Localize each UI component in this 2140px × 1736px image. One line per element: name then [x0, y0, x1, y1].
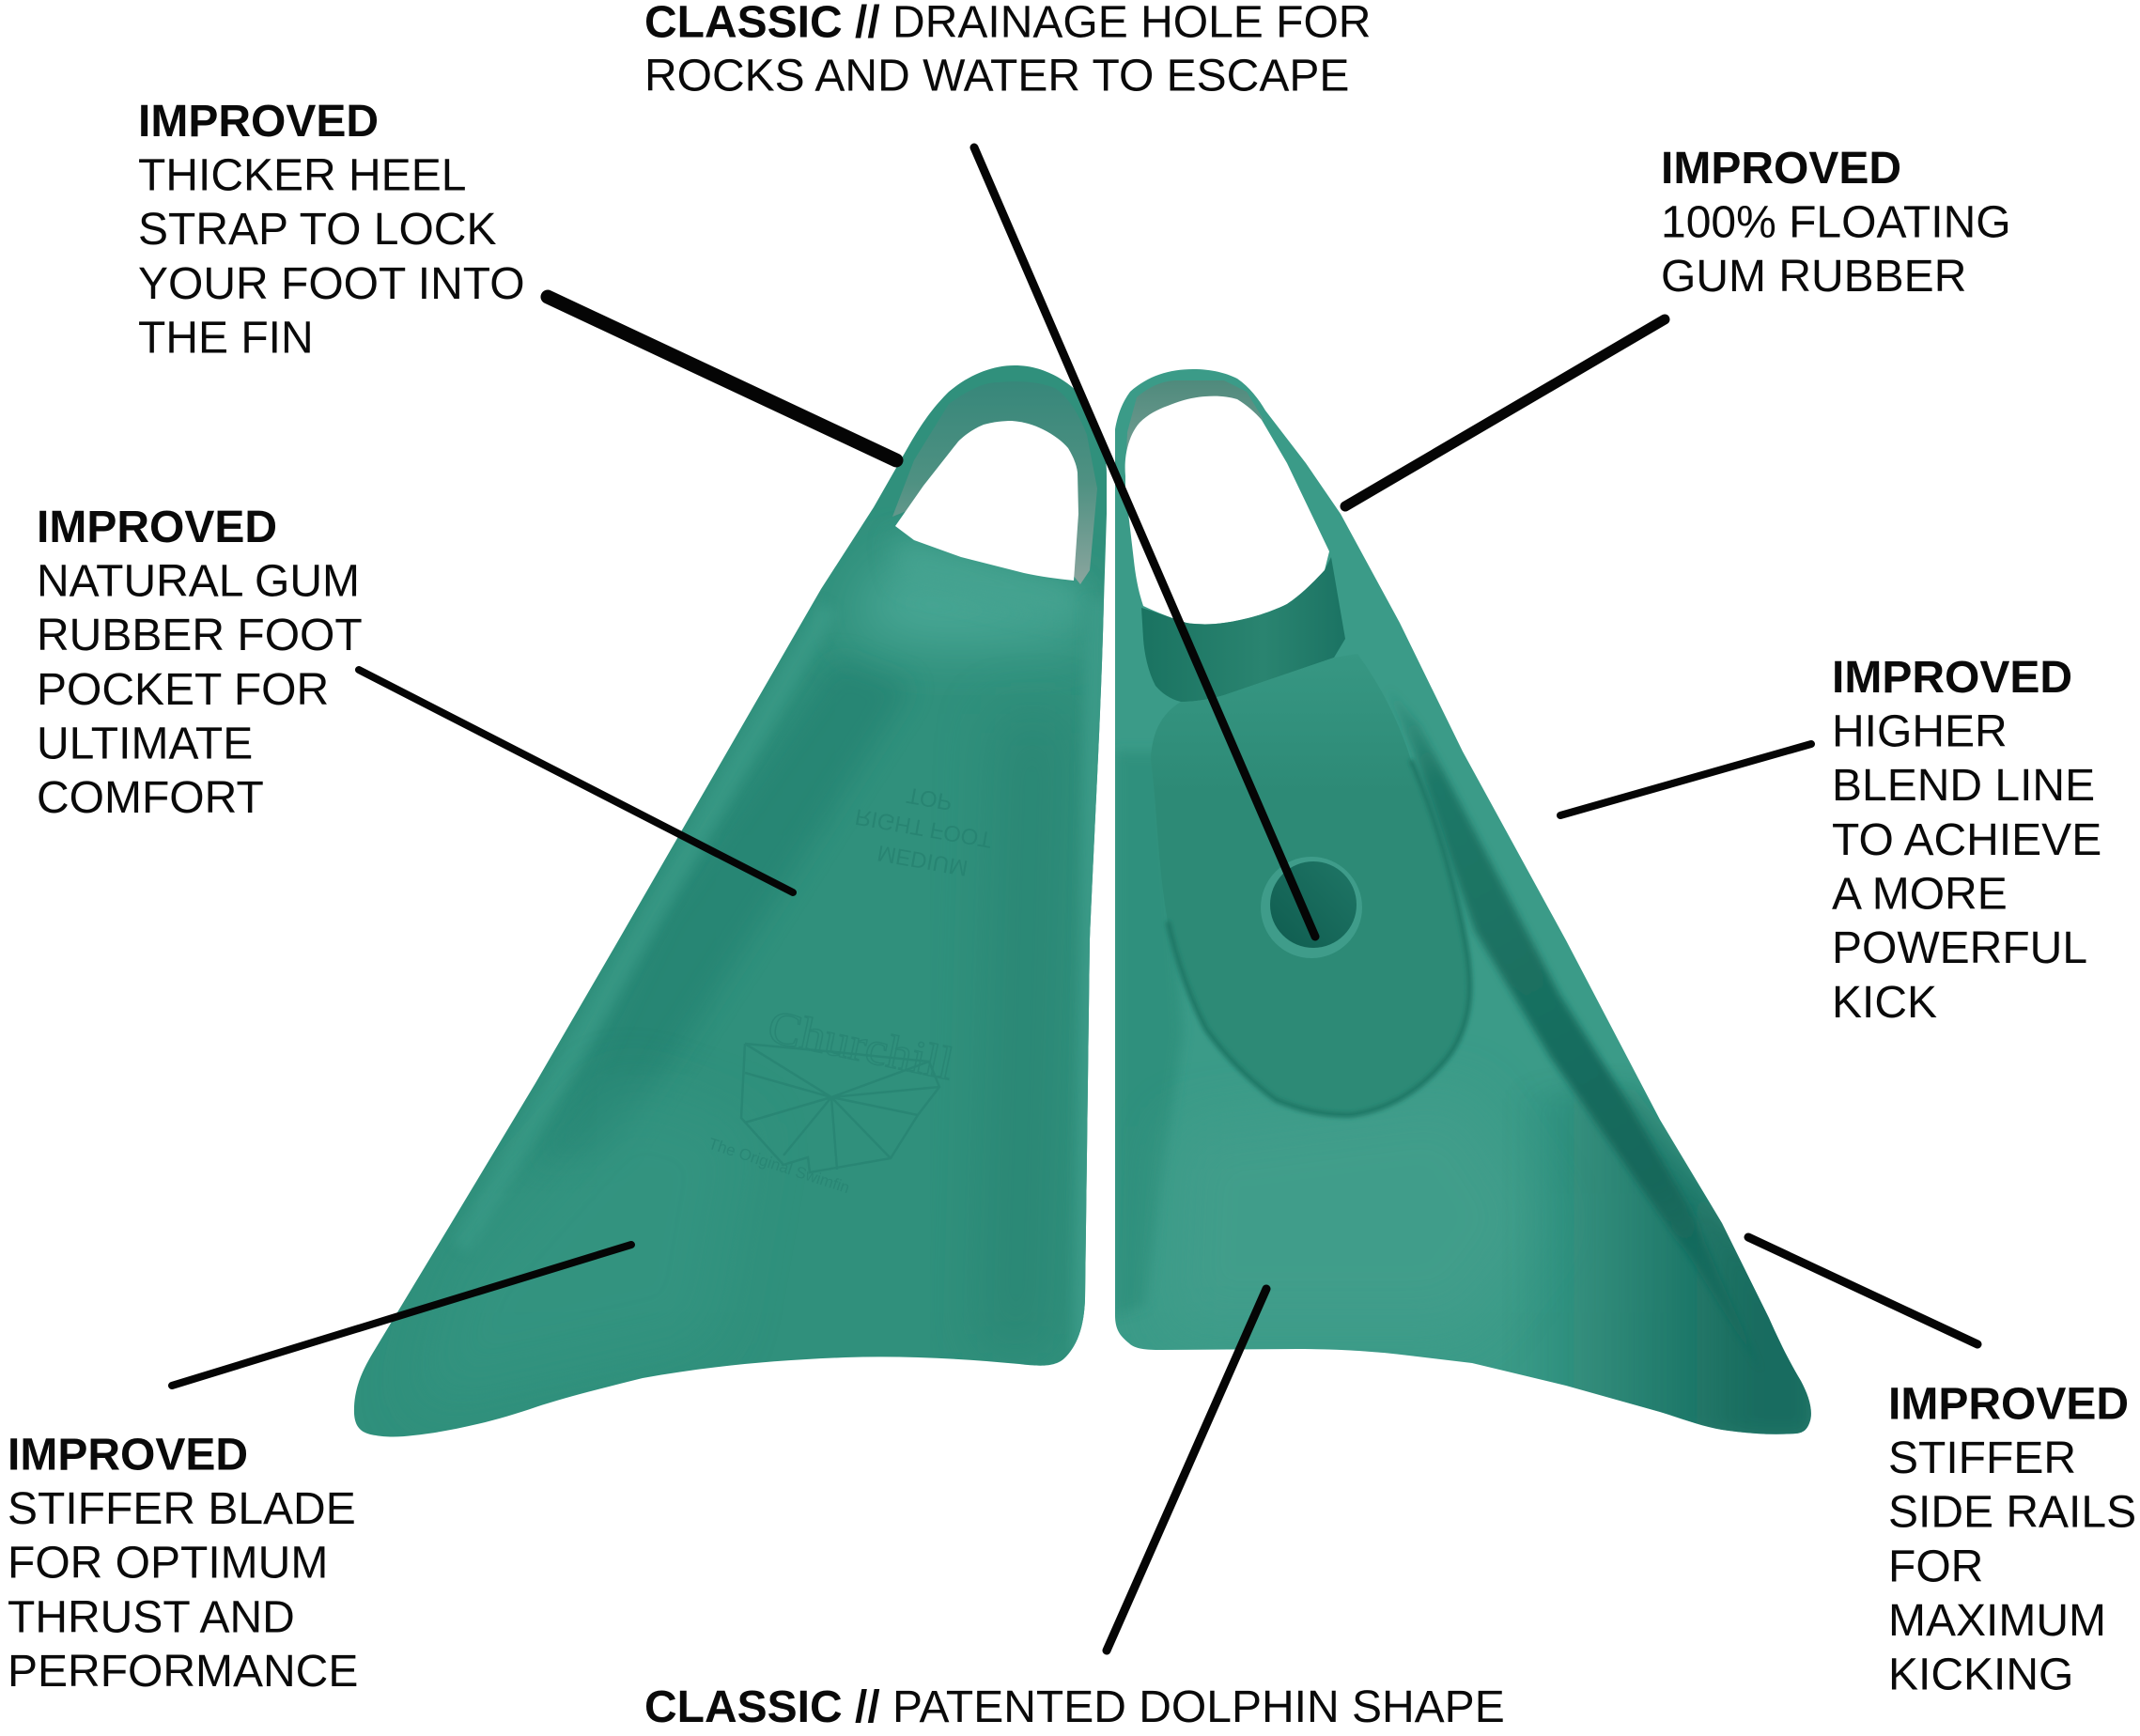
callout: dolphin shape: CLASSIC // PATENTED DOLPHIN SHAPE — [644, 1682, 1505, 1732]
pointer: dolphin shape — [1107, 1289, 1266, 1651]
callout: floating rubber: IMPROVED — [1661, 144, 1901, 194]
callout: floating rubber: GUM RUBBER — [1661, 252, 1966, 302]
callout: side rails: KICKING — [1888, 1650, 2073, 1700]
callout: blend line: A MORE — [1832, 870, 2008, 919]
pointer: blend line — [1560, 744, 1811, 815]
callout: side rails: IMPROVED — [1888, 1379, 2129, 1430]
dark side rail — [1398, 711, 1730, 1313]
callout: heel strap: IMPROVED — [138, 97, 379, 147]
right fin foot opening — [1125, 396, 1329, 624]
embossed size text — [847, 774, 1000, 884]
embossed logo — [706, 1000, 958, 1197]
right fin foot pocket interior — [1141, 557, 1345, 702]
callout: blend line: POWERFUL — [1832, 923, 2087, 973]
embossed size text: MEDIUM — [876, 840, 969, 880]
callout: floating rubber: 100% FLOATING — [1661, 197, 2011, 248]
left fin heel strap inner face — [892, 381, 1097, 584]
callout: stiffer blade: THRUST AND — [8, 1593, 295, 1642]
callout: drainage hole: ROCKS AND WATER TO ESCAPE — [644, 51, 1349, 101]
callout: side rails: SIDE RAILS — [1888, 1488, 2136, 1537]
callout: foot pocket: COMFORT — [37, 773, 264, 823]
callout: stiffer blade: STIFFER BLADE — [8, 1484, 356, 1534]
callout: foot pocket: POCKET FOR — [37, 665, 329, 715]
embossed size text: RIGHT FOOT — [853, 803, 995, 852]
left fin — [354, 365, 1109, 1437]
callout: side rails: STIFFER — [1888, 1434, 2076, 1483]
callout: foot pocket: NATURAL GUM — [37, 556, 360, 607]
embossed logo: The Original Swimfin — [706, 1135, 852, 1197]
callout: blend line: KICK — [1832, 978, 1937, 1028]
callout: stiffer blade: IMPROVED — [8, 1430, 248, 1480]
callout: heel strap: THICKER HEEL — [138, 150, 466, 201]
callout: heel strap: STRAP TO LOCK — [138, 205, 496, 255]
right fin heel strap inner face — [1125, 380, 1264, 479]
pointer: side rails — [1748, 1237, 1977, 1344]
callout: heel strap: YOUR FOOT INTO — [138, 259, 525, 309]
callout: side rails: FOR — [1888, 1542, 1983, 1591]
right fin raised foot pocket — [1151, 654, 1470, 1115]
callout: blend line: TO ACHIEVE — [1832, 815, 2101, 865]
pointer: foot pocket — [359, 670, 793, 892]
pointer: heel strap — [548, 297, 896, 460]
callout: blend line: BLEND LINE — [1832, 761, 2095, 811]
callout: foot pocket: RUBBER FOOT — [37, 611, 363, 660]
embossed logo: Churchill — [764, 1000, 958, 1090]
pointer lines — [172, 147, 1977, 1651]
callout: side rails: MAXIMUM — [1888, 1596, 2106, 1646]
callout: heel strap: THE FIN — [138, 314, 314, 363]
callout: stiffer blade: PERFORMANCE — [8, 1647, 358, 1697]
callout: foot pocket: IMPROVED — [37, 503, 277, 552]
drainage hole — [1261, 857, 1362, 958]
right fin — [1115, 369, 1822, 1447]
callout: blend line: IMPROVED — [1832, 653, 2072, 703]
tail shading — [1538, 1085, 1811, 1434]
right fin body — [1115, 369, 1811, 1434]
pocket shadow edge — [1168, 760, 1470, 1115]
callout: stiffer blade: FOR OPTIMUM — [8, 1539, 328, 1588]
pointer: drainage hole — [974, 147, 1315, 937]
callout: blend line: HIGHER — [1832, 706, 2008, 757]
pointer: stiffer blade — [172, 1245, 631, 1386]
pointer: floating rubber — [1345, 319, 1665, 506]
left fin foot opening — [895, 421, 1078, 581]
left fin body — [354, 365, 1107, 1437]
embossed size text: TOP — [905, 782, 954, 814]
callout: foot pocket: ULTIMATE — [37, 720, 253, 768]
